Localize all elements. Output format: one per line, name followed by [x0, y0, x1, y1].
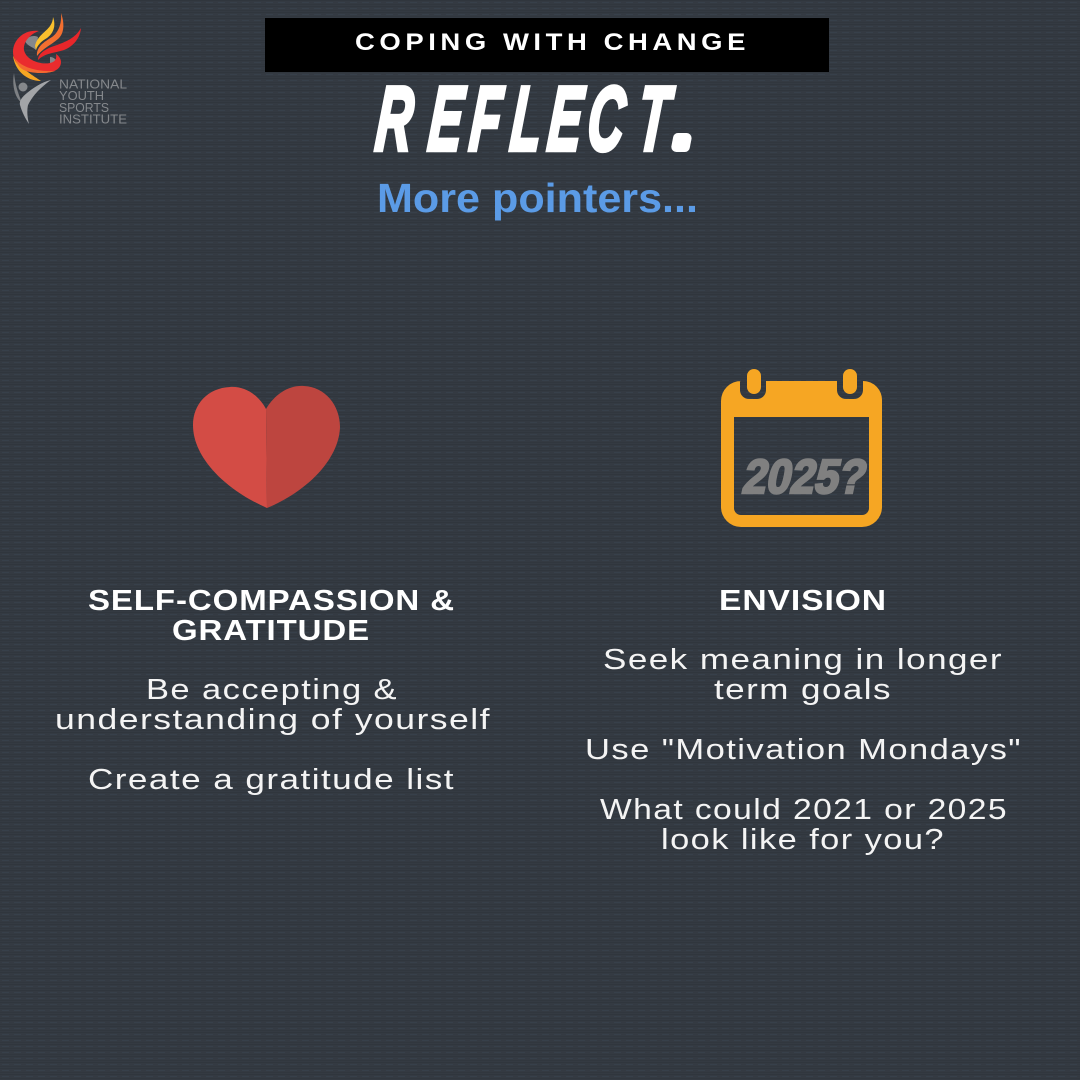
- title: Reflect: REFLECT: [372, 67, 678, 170]
- icon: calendar: [721, 369, 882, 527]
- panel: self-compassion and gratitude: [55, 386, 491, 796]
- logo wordmark: YOUTH: [59, 89, 104, 103]
- logo athlete figure: [13, 73, 51, 124]
- logo: National Youth Sports Institute: [13, 13, 127, 126]
- logo flame swirl: [13, 13, 81, 81]
- logo wordmark: NATIONAL: [59, 78, 127, 92]
- text: envision pointers: Use "Motivation Mondays": [585, 734, 1022, 766]
- logo wordmark: [59, 78, 127, 126]
- text: envision pointers: term goals: [714, 674, 892, 706]
- heading: self-compassion and gratitude: SELF-COMPASSION &: [88, 585, 455, 617]
- logo wordmark: INSTITUTE: [59, 112, 127, 126]
- top banner: COPING WITH CHANGE: [355, 29, 750, 56]
- text: self-compassion pointers: Be accepting &: [146, 674, 398, 706]
- text: self-compassion pointers: understanding of yourself: [55, 704, 491, 736]
- text: envision pointers: Seek meaning in longer: [603, 644, 1003, 676]
- text: self-compassion pointers: [55, 674, 491, 796]
- top banner: [265, 18, 829, 72]
- text: envision pointers: What could 2021 or 2025: [600, 794, 1008, 826]
- title: Reflect: .: [675, 93, 692, 160]
- panel: envision: [585, 369, 1022, 856]
- calendar label: 2025?: [739, 450, 872, 504]
- text: envision pointers: look like for you?: [661, 824, 945, 856]
- logo wordmark: SPORTS: [59, 101, 109, 115]
- icon: heart: [193, 386, 340, 508]
- text: envision pointers: [585, 644, 1022, 856]
- heading: self-compassion and gratitude: [88, 585, 455, 647]
- text: self-compassion pointers: Create a gratitude list: [88, 764, 455, 796]
- heading: self-compassion and gratitude: GRATITUDE: [172, 615, 370, 647]
- subtitle: More pointers...: [377, 175, 698, 221]
- heading: envision: ENVISION: [719, 585, 887, 617]
